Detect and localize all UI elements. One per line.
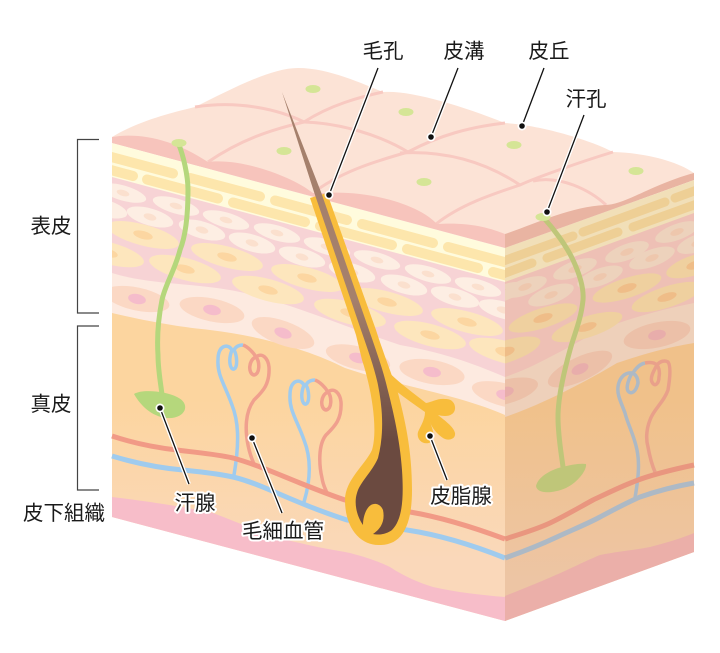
- right ridge shading: [505, 173, 694, 248]
- skin grooves: [195, 92, 613, 224]
- capillary loop 2: [290, 380, 341, 502]
- capillary loops front: [218, 345, 341, 502]
- sebaceous gland: [383, 366, 455, 443]
- pores on surface: [276, 85, 644, 186]
- callout: 汗孔: 汗孔: [566, 88, 606, 111]
- callout: 皮丘: 皮丘: [528, 40, 570, 63]
- subcutaneous fat layer: [112, 497, 505, 625]
- callout: 汗孔: [542, 88, 606, 216]
- right dermis: [505, 340, 694, 640]
- right upper cells: [505, 221, 694, 306]
- front ridge shading: [112, 136, 505, 248]
- callout: 皮脂腺: [426, 432, 492, 508]
- callout: 毛細血管: [242, 434, 324, 543]
- callout: 汗腺: 汗腺: [174, 492, 216, 515]
- right pink layer: [505, 200, 694, 377]
- callout: 汗腺: [156, 404, 216, 515]
- bracket: dermis: [78, 326, 99, 490]
- pale upper cells: [112, 184, 505, 320]
- capillary loop right: [618, 361, 670, 498]
- peach lower cells: [112, 286, 505, 407]
- gland body: [134, 391, 185, 418]
- right peach cells: [505, 321, 690, 404]
- pink spinous layer: [112, 170, 505, 377]
- right salmon blood vessel: [505, 465, 694, 539]
- hair follicle with sebaceous gland: [282, 92, 455, 545]
- peach basal layer: [112, 273, 505, 415]
- duct opening: [172, 139, 186, 147]
- right blue blood vessel: [505, 483, 694, 558]
- panel: skin surface (top face): [112, 68, 694, 248]
- callout: 皮溝: [426, 40, 484, 142]
- front salmon blood vessel: [112, 436, 505, 539]
- hair shaft and bulb: [282, 92, 403, 535]
- right peach layer: [505, 300, 694, 417]
- yellow middle cells: [112, 221, 505, 364]
- right duct opening: [536, 213, 550, 221]
- cream stratum corneum: [112, 143, 505, 282]
- capillary loop 1: [218, 345, 269, 475]
- panel: right face layers: [505, 180, 694, 621]
- follicle sheath: [310, 193, 412, 545]
- callout: 毛細血管: 毛細血管: [242, 520, 324, 543]
- bracket: epidermis: [78, 140, 99, 313]
- callout: 皮溝: 皮溝: [444, 40, 484, 63]
- right fat layer: [505, 533, 694, 621]
- callout: 皮脂腺: 皮脂腺: [430, 485, 492, 508]
- sweat gland right: [536, 213, 586, 492]
- callout: 毛孔: 毛孔: [362, 40, 404, 63]
- callout: 毛孔: [324, 40, 404, 200]
- sweat gland left: [134, 139, 188, 418]
- right corneum bands: [495, 187, 705, 277]
- callout: 皮丘: [518, 40, 570, 130]
- right cream layer: [505, 180, 694, 282]
- dermis layer: [112, 300, 505, 625]
- corneum bands: [100, 154, 525, 280]
- right gland body: [536, 464, 586, 492]
- panel: front face layers: [112, 143, 505, 621]
- duct: [158, 145, 188, 395]
- front blue blood vessel: [112, 456, 505, 558]
- label: 表皮: 表皮: [30, 215, 72, 238]
- label: 真皮: 真皮: [30, 393, 72, 416]
- right duct: [543, 217, 583, 467]
- right yellow cells: [505, 255, 694, 364]
- label: 皮下組織: 皮下組織: [23, 502, 105, 525]
